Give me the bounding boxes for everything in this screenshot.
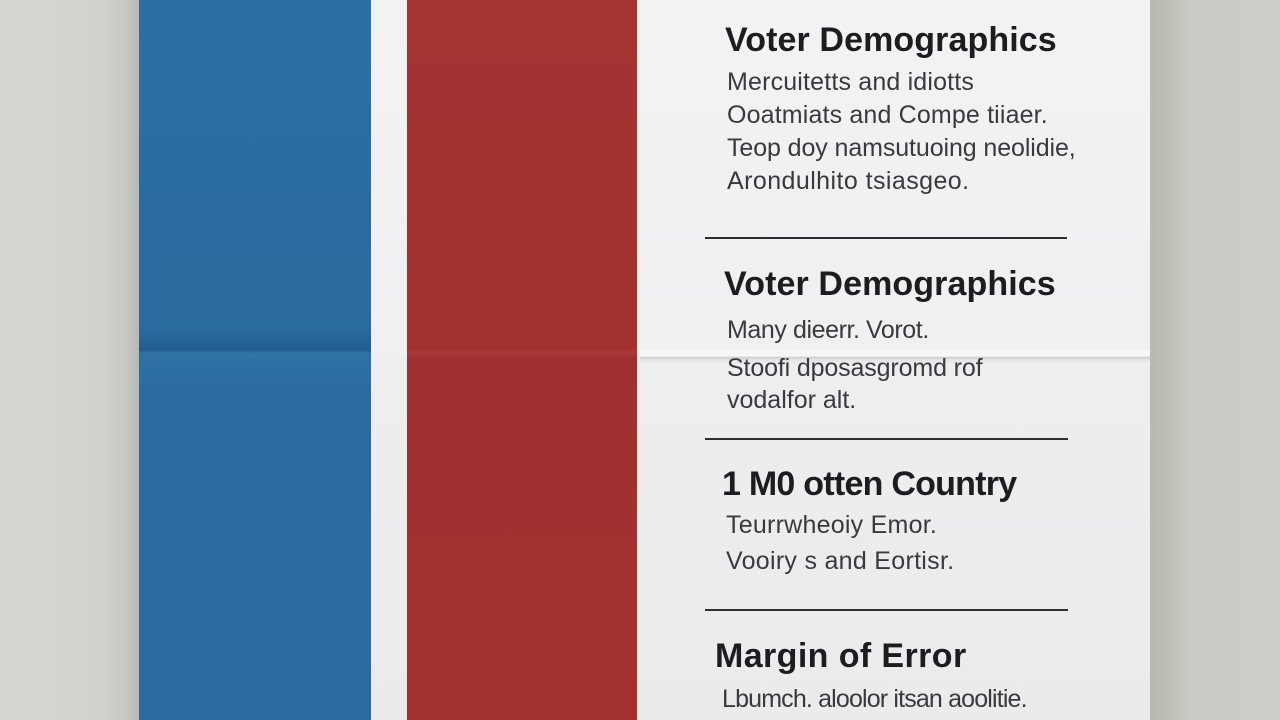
heading: section 3: 1 M0 otten Country: [722, 465, 1016, 503]
text block: section 3: [726, 511, 954, 575]
text block: section 2: Stoofi dposasgromd rof: [727, 354, 982, 382]
text block: section 2: [727, 316, 983, 414]
text block: section 1: Teop doy namsutuoing neolidie,: [727, 134, 1076, 162]
heading: section 2: Voter Demographics: [724, 265, 1056, 303]
divider: [705, 438, 1068, 440]
text block: section 1: [727, 68, 1076, 195]
poster: [139, 0, 1150, 720]
text block: section 1: Ooatmiats and Compe tiiaer.: [727, 101, 1048, 129]
text block: section 1: Mercuitetts and idiotts: [727, 68, 974, 96]
panel: blue stripe: [139, 0, 371, 720]
divider: [705, 237, 1067, 239]
text block: section 1: Arondulhito tsiasgeo.: [727, 167, 970, 195]
text block: section 3: Vooiry s and Eortisr.: [726, 547, 954, 575]
text block: section 2: Many dieerr. Vorot.: [727, 316, 929, 344]
panel: fold crease paper: [640, 350, 1150, 364]
text block: section 4: Lbumch. aloolor itsan aoolitie.: [722, 685, 1027, 713]
heading: section 4: Margin of Error: [715, 637, 967, 675]
heading: section 1: Voter Demographics: [725, 21, 1057, 59]
text block: section 3: Teurrwheoiy Emor.: [726, 511, 937, 539]
text block: section 2: vodalfor alt.: [727, 386, 856, 414]
panel: red stripe: [407, 0, 637, 720]
divider: [705, 609, 1068, 611]
